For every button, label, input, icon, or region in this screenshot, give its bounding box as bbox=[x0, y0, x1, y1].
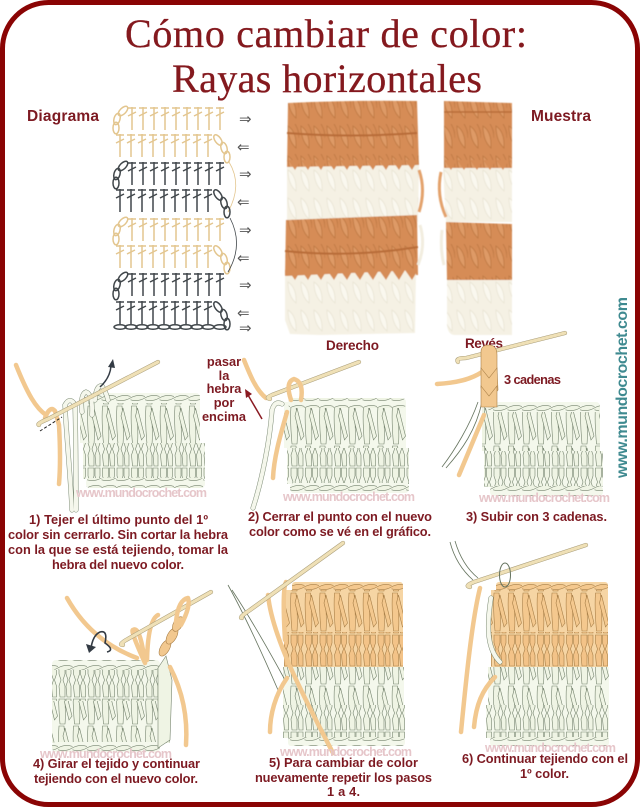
tan rows bbox=[113, 105, 236, 274]
step 2 text: 2) Cerrar el punto con el nuevo bbox=[248, 509, 432, 524]
direction arrows: ⇒ bbox=[239, 221, 252, 239]
direction arrows: ⇐ bbox=[237, 304, 250, 322]
fabric bbox=[283, 582, 405, 746]
step 1 text: 1) Tejer el último punto del 1º bbox=[29, 512, 208, 527]
title: Rayas horizontales bbox=[172, 56, 482, 101]
illustration 3: three chains bbox=[437, 333, 603, 496]
step 2 text bbox=[248, 509, 432, 539]
vertical watermark: www.mundocrochet.com bbox=[614, 297, 631, 479]
callout: pasar la hebra por encima: por bbox=[214, 395, 234, 410]
hook bbox=[457, 333, 565, 362]
step 5 text: nuevamente repetir los pasos bbox=[255, 770, 432, 785]
label: Muestra: Muestra bbox=[531, 108, 591, 125]
watermark 3: www.mundocrochet.com bbox=[478, 491, 610, 505]
step 5 text: 1 a 4. bbox=[327, 784, 360, 799]
dark rows bbox=[113, 160, 237, 330]
watermark 6: www.mundocrochet.com bbox=[484, 741, 616, 755]
callout: pasar la hebra por encima: encima bbox=[202, 409, 247, 424]
yarn bbox=[228, 585, 278, 690]
step 1 text: color sin cerrarlo. Sin cortar la hebra bbox=[8, 527, 229, 542]
illustration 2: closing the stitch bbox=[244, 360, 409, 508]
chain braid bbox=[157, 615, 186, 658]
direction arrows: ⇒ bbox=[239, 165, 252, 183]
step 4 text: 4) Girar el tejido y continuar bbox=[33, 756, 200, 771]
step 4 text bbox=[33, 756, 200, 786]
watermark 5: www.mundocrochet.com bbox=[279, 745, 412, 759]
direction arrows: ⇒ bbox=[239, 276, 252, 294]
callout: pasar la hebra por encima: la bbox=[219, 368, 230, 383]
label: 3 cadenas: 3 cadenas bbox=[504, 372, 561, 387]
step 5 text: 5) Para cambiar de color bbox=[269, 755, 418, 770]
callout: pasar la hebra por encima: pasar bbox=[207, 354, 241, 369]
hook bbox=[468, 545, 586, 587]
label: Revés: Revés bbox=[465, 336, 503, 351]
hook bbox=[121, 592, 211, 645]
step 1 text bbox=[8, 512, 229, 572]
step 4 text: tejiendo con el nuevo color. bbox=[34, 771, 198, 786]
watermark 2: www.mundocrochet.com bbox=[282, 490, 415, 504]
hook bbox=[241, 543, 343, 618]
photo: swatch reverse side bbox=[439, 101, 512, 335]
fabric bbox=[80, 393, 205, 488]
direction arrows: ⇐ bbox=[237, 193, 250, 211]
crochet diagram bbox=[113, 105, 237, 330]
illustration 4: turning the work bbox=[52, 592, 211, 752]
illustration 6: continue with first color bbox=[450, 541, 609, 746]
label: Derecho: Derecho bbox=[326, 338, 379, 353]
yarn bbox=[244, 360, 266, 398]
label: Diagrama: Diagrama bbox=[27, 108, 99, 125]
hook bbox=[38, 362, 158, 425]
step 6 text: 6) Continuar tejiendo con el bbox=[462, 751, 628, 766]
arrow bbox=[40, 359, 115, 431]
step 6 text: 1º color. bbox=[520, 766, 569, 781]
photo: swatch right side bbox=[285, 101, 423, 335]
step 5 text bbox=[255, 755, 432, 799]
illustration 1: last stitch unfinished bbox=[16, 359, 205, 510]
step 6 text bbox=[462, 751, 628, 781]
title: Cómo cambiar de color: bbox=[125, 11, 527, 56]
yarn bbox=[450, 542, 473, 580]
callout: pasar la hebra por encima: hebra bbox=[207, 381, 242, 396]
yarn bbox=[16, 365, 46, 415]
direction arrows bbox=[237, 110, 252, 337]
direction arrows: ⇐ bbox=[237, 138, 250, 156]
yarn bbox=[67, 598, 137, 658]
fabric bbox=[486, 582, 609, 746]
hook bbox=[268, 362, 359, 399]
fabric bbox=[284, 398, 409, 493]
direction arrows: ⇐ bbox=[237, 249, 250, 267]
chain braid bbox=[481, 345, 498, 407]
illustration 5: repeat color change bbox=[228, 543, 405, 753]
watermark 1: www.mundocrochet.com bbox=[75, 486, 207, 500]
watermark 4: www.mundocrochet.com bbox=[39, 747, 172, 761]
step 1 text: con la que se está tejiendo, tomar la bbox=[8, 542, 229, 557]
step 2 text: color como se vé en el gráfico. bbox=[249, 524, 431, 539]
step 3 text: 3) Subir con 3 cadenas. bbox=[466, 509, 607, 524]
arrow: red bbox=[245, 389, 262, 419]
direction arrows: ⇒ bbox=[239, 110, 252, 128]
fabric bbox=[52, 656, 172, 752]
direction arrows: ⇒ bbox=[239, 319, 252, 337]
callout: pasar la hebra por encima bbox=[202, 354, 247, 424]
turning arrow bbox=[86, 632, 111, 653]
step 1 text: hebra del nuevo color. bbox=[52, 557, 184, 572]
title bbox=[125, 11, 527, 101]
yarn bbox=[442, 402, 478, 467]
fabric bbox=[482, 402, 603, 496]
